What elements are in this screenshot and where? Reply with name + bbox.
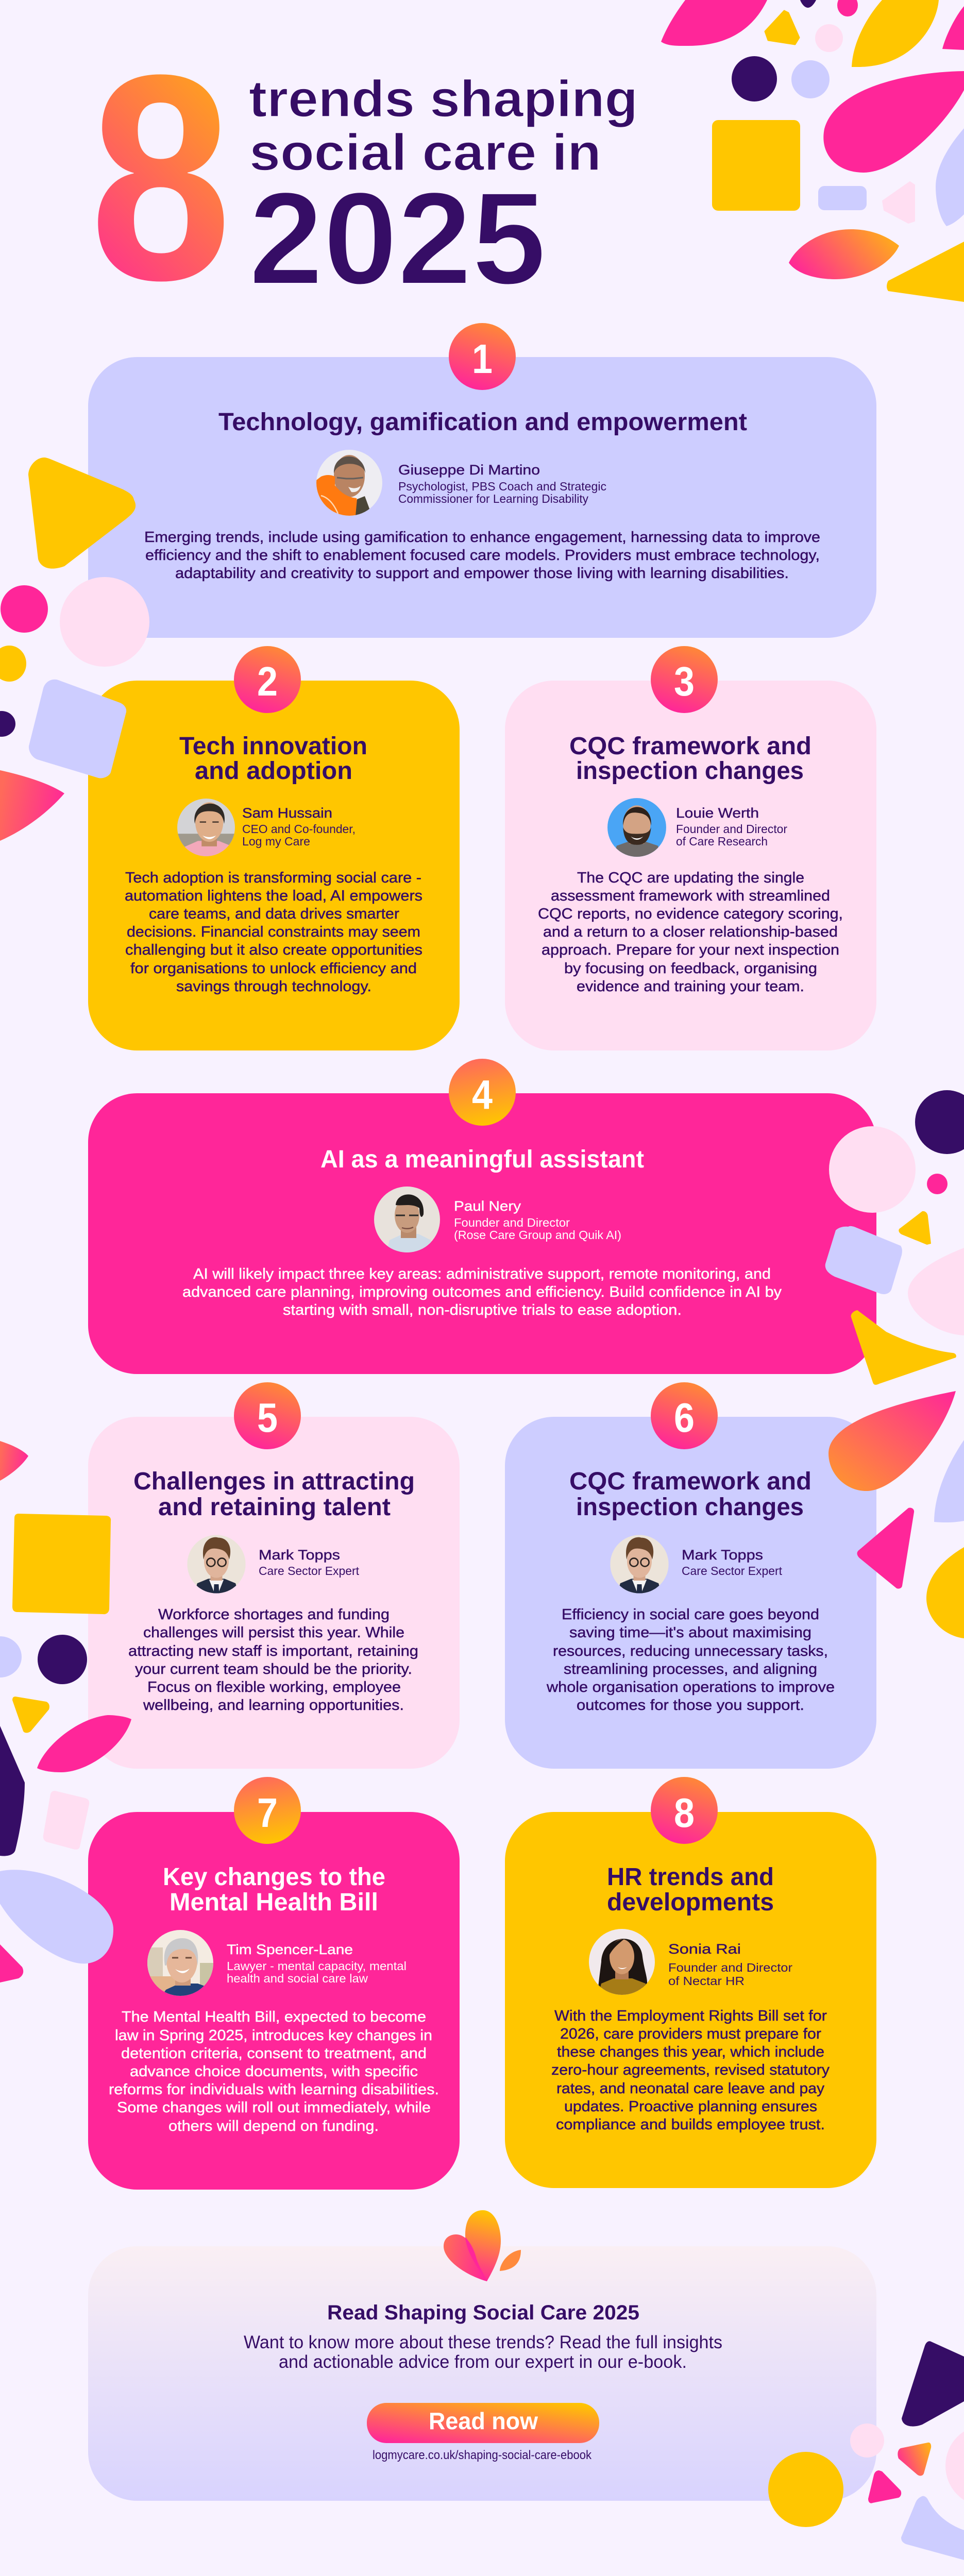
body text <box>109 2009 439 2134</box>
body text: attracting new staff is important, retaining <box>128 1643 418 1659</box>
expert role: Founder and Director <box>676 822 787 836</box>
body text: assessment framework with streamlined <box>551 888 830 904</box>
body text: and a return to a closer relationship-based <box>543 924 838 940</box>
body text: your current team should be the priority. <box>135 1661 412 1677</box>
panel 6: CQC framework <box>505 1382 876 1769</box>
portrait: Giuseppe Di Martino <box>316 450 382 516</box>
badge 2 <box>234 646 301 713</box>
heading <box>569 1468 811 1521</box>
heading: inspection changes <box>576 1494 804 1521</box>
expert role: (Rose Care Group and Quik AI) <box>454 1228 621 1242</box>
panel 8: HR trends <box>505 1777 876 2188</box>
expert role: health and social care law <box>227 1972 368 1985</box>
description <box>244 2332 722 2372</box>
title line 1: trends shaping <box>249 70 638 128</box>
decorative shapes: top right <box>661 0 964 302</box>
body text: starting with small, non-disruptive trials to ease adoption. <box>283 1302 682 1318</box>
panel 1: technology <box>88 323 876 638</box>
heading: Key changes to the <box>163 1863 385 1891</box>
portrait: Sonia Rai <box>589 1929 655 1995</box>
body text: Efficiency in social care goes beyond <box>562 1606 819 1623</box>
heading: CQC framework and <box>569 1468 811 1495</box>
year 2025: 2025 <box>249 165 546 312</box>
expert role: of Care Research <box>676 835 768 848</box>
body text: Focus on flexible working, employee <box>147 1679 401 1696</box>
body text: With the Employment Rights Bill set for <box>554 2008 827 2024</box>
body text: savings through technology. <box>176 978 371 995</box>
body text: Workforce shortages and funding <box>158 1606 390 1623</box>
expert name: Mark Topps <box>259 1547 340 1563</box>
panel 2: tech innovation <box>88 646 460 1050</box>
body text: adaptability and creativity to support and empower those living with learning disabilities. <box>175 565 789 582</box>
body text: evidence and training your team. <box>577 978 804 995</box>
big gradient number 8: 8 <box>90 14 231 341</box>
panel 7: Mental Health Bill <box>88 1777 460 2190</box>
badge 3: 3 <box>674 658 695 704</box>
body text: automation lightens the load, AI empowers <box>125 888 422 904</box>
button: read now: Read now <box>429 2408 538 2434</box>
description: Want to know more about these trends? Read the full insights <box>244 2332 722 2352</box>
heading: Mental Health Bill <box>170 1889 378 1916</box>
heading: inspection changes <box>576 757 804 785</box>
portrait: Mark Topps <box>187 1535 246 1594</box>
badge 7 <box>234 1777 301 1844</box>
expert role: Commissioner for Learning Disability <box>398 492 588 505</box>
portrait: Sam Hussain <box>177 799 235 856</box>
body text: challenging but it also create opportunities <box>125 942 422 958</box>
body text: 2026, care providers must prepare for <box>560 2026 821 2042</box>
expert name: Sam Hussain <box>242 805 332 821</box>
title line 2: social care in <box>249 124 601 181</box>
heading <box>133 1468 415 1521</box>
panel 5: attracting talent <box>88 1382 460 1769</box>
heading: CQC framework and <box>569 733 811 760</box>
body text: reforms for individuals with learning disabilities. <box>109 2081 439 2098</box>
expert role: Care Sector Expert <box>259 1564 360 1578</box>
body text: resources, reducing unnecessary tasks, <box>553 1643 828 1659</box>
badge 1: 1 <box>472 336 493 382</box>
body text: whole organisation operations to improve <box>546 1679 835 1696</box>
heading: and adoption <box>195 757 352 785</box>
title block <box>90 14 638 341</box>
badge 6: 6 <box>674 1395 695 1440</box>
expert role: Founder and Director <box>668 1961 792 1974</box>
body text: advanced care planning, improving outcomes and efficiency. Build confidence in AI by <box>182 1284 782 1300</box>
heading: AI as a meaningful assistant <box>320 1146 644 1173</box>
expert name: Giuseppe Di Martino <box>398 462 540 478</box>
body text: rates, and neonatal care leave and pay <box>556 2080 825 2097</box>
badge 7: 7 <box>257 1790 278 1836</box>
body text: advance choice documents, with specific <box>130 2063 418 2080</box>
expert role <box>398 480 606 505</box>
expert role: Lawyer - mental capacity, mental <box>227 1959 407 1973</box>
expert role: Founder and Director <box>454 1216 570 1229</box>
expert name: Sonia Rai <box>668 1941 741 1957</box>
body text: efficiency and the shift to enablement focused care models. Providers must embrace technology, <box>145 547 820 564</box>
link: logmycare.co.uk/shaping-social-care-ebook <box>373 2448 592 2462</box>
body text: The Mental Health Bill, expected to become <box>122 2009 426 2025</box>
body text: outcomes for those you support. <box>577 1697 804 1714</box>
heading: HR trends and <box>607 1863 774 1891</box>
body text: zero-hour agreements, revised statutory <box>551 2062 830 2078</box>
body text: by focusing on feedback, organising <box>564 960 817 977</box>
expert role: Log my Care <box>242 835 310 848</box>
body text: AI will likely impact three key areas: administrative support, remote monitoring, and <box>193 1266 771 1282</box>
body text: wellbeing, and learning opportunities. <box>143 1697 404 1714</box>
badge 2: 2 <box>257 658 278 704</box>
body text: Tech adoption is transforming social care - <box>125 870 421 886</box>
badge 4 <box>449 1059 516 1126</box>
panel 3: CQC framework <box>505 646 876 1050</box>
expert role: Care Sector Expert <box>682 1564 783 1578</box>
body text: others will depend on funding. <box>168 2118 379 2134</box>
body text <box>144 529 820 582</box>
body text: Some changes will roll out immediately, while <box>117 2099 431 2116</box>
badge 5 <box>234 1382 301 1449</box>
heading: and retaining talent <box>158 1494 391 1521</box>
expert role: CEO and Co-founder, <box>242 822 356 836</box>
expert role <box>668 1961 792 1988</box>
badge 8: 8 <box>674 1790 695 1836</box>
portrait: Paul Nery <box>374 1187 440 1252</box>
body text <box>538 870 843 995</box>
badge 4: 4 <box>472 1072 493 1117</box>
expert name: Mark Topps <box>682 1547 763 1563</box>
expert role <box>676 822 787 848</box>
badge 5: 5 <box>257 1395 278 1440</box>
badge 8 <box>651 1777 718 1844</box>
heading: Challenges in attracting <box>133 1468 415 1495</box>
body text: detention criteria, consent to treatment, and <box>121 2045 427 2062</box>
expert role <box>242 822 356 848</box>
body text: The CQC are updating the single <box>577 870 804 886</box>
expert role: Psychologist, PBS Coach and Strategic <box>398 480 606 493</box>
body text: updates. Proactive planning ensures <box>564 2098 817 2115</box>
body text: Emerging trends, include using gamification to enhance engagement, harnessing data to improve <box>144 529 820 546</box>
body text: these changes this year, which include <box>557 2044 824 2060</box>
panel 4: AI assistant <box>88 1059 876 1374</box>
body text: for organisations to unlock efficiency and <box>130 960 417 977</box>
badge 1 <box>449 323 516 390</box>
body text: compliance and builds employee trust. <box>556 2116 825 2133</box>
portrait: Tim Spencer-Lane <box>147 1930 213 1996</box>
body text: saving time—it's about maximising <box>569 1624 811 1641</box>
expert role <box>454 1216 621 1242</box>
heading: Tech innovation <box>179 733 367 760</box>
body text: approach. Prepare for your next inspection <box>542 942 839 958</box>
portrait: Mark Topps <box>610 1535 669 1594</box>
icon: logo leaves <box>444 2210 521 2281</box>
body text <box>546 1606 835 1714</box>
expert name: Louie Werth <box>676 805 759 821</box>
body text <box>182 1266 782 1318</box>
heading <box>163 1863 385 1916</box>
body text <box>128 1606 418 1714</box>
heading <box>607 1863 774 1916</box>
heading <box>569 733 811 785</box>
body text: decisions. Financial constraints may seem <box>127 924 420 940</box>
heading: Read Shaping Social Care 2025 <box>327 2301 639 2324</box>
body text: care teams, and data drives smarter <box>149 906 399 922</box>
expert name: Paul Nery <box>454 1198 521 1214</box>
body text: law in Spring 2025, introduces key changes in <box>115 2027 432 2044</box>
body text: challenges will persist this year. While <box>143 1624 404 1641</box>
expert role: of Nectar HR <box>668 1974 745 1988</box>
body text <box>125 870 422 995</box>
body text: CQC reports, no evidence category scoring, <box>538 906 843 922</box>
decorative shapes: right of panel 6 <box>828 1391 964 1638</box>
decorative shapes: right of panel 4 <box>825 1090 964 1385</box>
body text <box>551 2008 830 2133</box>
call to action panel <box>88 2210 876 2501</box>
expert role <box>227 1959 407 1985</box>
heading <box>179 733 367 785</box>
decorative shapes: bottom right <box>768 2341 964 2560</box>
body text: streamlining processes, and aligning <box>564 1661 817 1677</box>
description: and actionable advice from our expert in our e-book. <box>279 2352 687 2372</box>
expert name: Tim Spencer-Lane <box>227 1942 353 1957</box>
heading: Technology, gamification and empowerment <box>218 409 747 436</box>
decorative shapes: left of panels 5 and 7 <box>0 1441 131 1982</box>
decorative shapes: left of panels 1 and 2 <box>0 457 149 841</box>
heading: developments <box>607 1889 774 1916</box>
badge 6 <box>651 1382 718 1449</box>
button: read now <box>367 2403 599 2443</box>
portrait: Louie Werth <box>607 798 666 857</box>
badge 3 <box>651 646 718 713</box>
